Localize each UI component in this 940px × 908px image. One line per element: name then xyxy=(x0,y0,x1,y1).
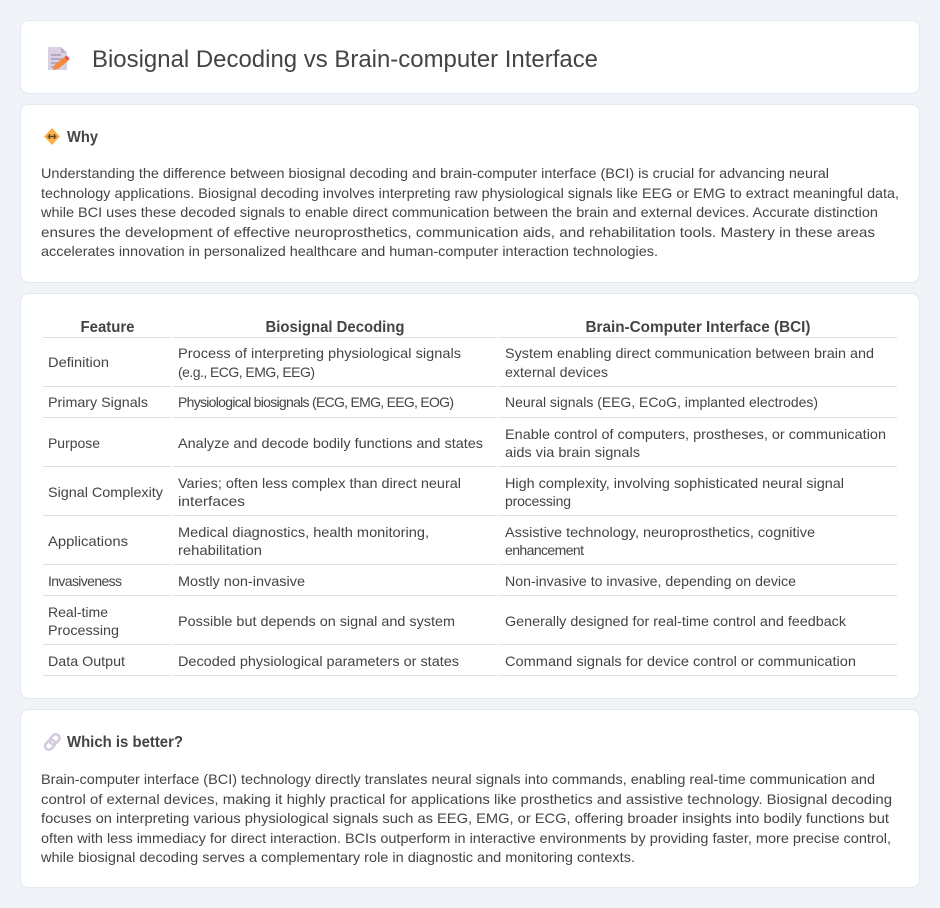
row: purpose: Enable control of computers, prostheses, or communication xyxy=(505,426,886,442)
table header: Biosignal Decoding xyxy=(266,319,404,336)
text block: which paragraph: control of external devices, making it highly practical for applications like prosthetics and assistive technology. Biosignal decoding xyxy=(41,791,892,807)
text block: why paragraph: ensures the development of effective neuroprosthetics, communication aids, and rehabilitation tools. Mastery in these areas xyxy=(41,224,875,240)
row: data output: Data Output xyxy=(48,653,125,669)
icon: orange diamond xyxy=(44,128,60,145)
text block: which paragraph xyxy=(40,771,892,865)
row: definition: (e.g., ECG, EMG, EEG) xyxy=(178,364,315,380)
row: signal complexity: High complexity, involving sophisticated neural signal xyxy=(505,475,844,491)
row: applications: Assistive technology, neuroprosthetics, cognitive xyxy=(505,524,815,540)
heading: which is better: Which is better? xyxy=(67,734,183,751)
row: data output xyxy=(48,653,856,669)
row: definition: Definition xyxy=(48,354,109,370)
row: data output: Decoded physiological parameters or states xyxy=(178,653,459,669)
row: applications: Medical diagnostics, health monitoring, xyxy=(178,524,429,540)
text block: why paragraph: while BCI uses these decoded signals to enable direct communication between the brain and external devices. Accurate distinction xyxy=(40,204,878,220)
row: real-time processing: Processing xyxy=(48,622,119,638)
row: real-time processing: Possible but depends on signal and system xyxy=(178,613,455,629)
icon: link xyxy=(43,733,61,751)
row: invasiveness: Mostly non-invasive xyxy=(178,573,305,589)
row: definition xyxy=(48,345,874,380)
text block: which paragraph: while biosignal decoding serves a complementary role in diagnostic and monitoring contexts. xyxy=(40,849,635,865)
panel: comparison table xyxy=(20,294,920,698)
text block: which paragraph: focuses on interpreting various physiological signals such as EEG, EMG, or ECG, offering broader insights into bodily functions but xyxy=(41,810,889,826)
row: invasiveness xyxy=(48,573,796,589)
row: applications: Applications xyxy=(48,533,128,549)
row: signal complexity: Varies; often less complex than direct neural xyxy=(178,475,461,491)
row: applications xyxy=(48,524,815,558)
row: purpose: Purpose xyxy=(48,435,100,451)
row: primary signals: Neural signals (EEG, ECoG, implanted electrodes) xyxy=(505,394,818,410)
row: definition: Process of interpreting physiological signals xyxy=(178,345,461,361)
row: applications: rehabilitation xyxy=(178,542,262,558)
row: purpose: aids via brain signals xyxy=(505,444,640,460)
row: primary signals: Physiological biosignals (ECG, EMG, EEG, EOG) xyxy=(178,394,454,410)
panel: why xyxy=(20,104,920,282)
icon: memo with pencil xyxy=(48,47,70,70)
row: real-time processing: Generally designed for real-time control and feedback xyxy=(505,613,847,629)
text block: which paragraph: Brain-computer interface (BCI) technology directly translates neural signals into commands, enabling real-time communication and xyxy=(41,771,875,787)
row: signal complexity xyxy=(48,475,844,509)
row: primary signals xyxy=(48,394,818,410)
panel: which is better xyxy=(20,710,920,888)
text block: which paragraph: often with less immediacy for direct interaction. BCIs outperform in interactive environments by providing faster, more precise control, xyxy=(41,830,891,846)
table header: Brain-Computer Interface (BCI) xyxy=(586,319,810,336)
row: purpose xyxy=(48,426,886,460)
row: signal complexity: interfaces xyxy=(178,493,245,509)
row: definition: System enabling direct communication between brain and xyxy=(505,345,874,361)
row: invasiveness: Non-invasive to invasive, depending on device xyxy=(505,573,796,589)
row: invasiveness: Invasiveness xyxy=(48,573,122,589)
text block: why paragraph: accelerates innovation in personalized healthcare and human-computer interaction technologies. xyxy=(41,243,658,259)
table header xyxy=(80,319,810,336)
row: signal complexity: processing xyxy=(505,493,571,509)
title: Biosignal Decoding vs Brain-computer Interface xyxy=(92,46,598,73)
text block: why paragraph: technology applications. Biosignal decoding involves interpreting raw physiological signals like EEG or EMG to extract meaningful data, xyxy=(41,185,899,201)
text block: why paragraph: Understanding the difference between biosignal decoding and brain-computer interface (BCI) is crucial for advancing neural xyxy=(41,165,829,181)
panel: title header xyxy=(20,20,920,94)
table header: Feature xyxy=(80,319,135,336)
row: purpose: Analyze and decode bodily functions and states xyxy=(178,435,483,451)
row: applications: enhancement xyxy=(505,542,584,558)
text block: why paragraph xyxy=(40,165,899,259)
row: real-time processing: Real-time xyxy=(48,604,108,620)
row: definition: external devices xyxy=(505,364,608,380)
row: signal complexity: Signal Complexity xyxy=(48,484,163,500)
row: data output: Command signals for device control or communication xyxy=(505,653,856,669)
row: primary signals: Primary Signals xyxy=(48,394,148,410)
row: real-time processing xyxy=(48,604,847,638)
heading: why: Why xyxy=(67,129,98,146)
